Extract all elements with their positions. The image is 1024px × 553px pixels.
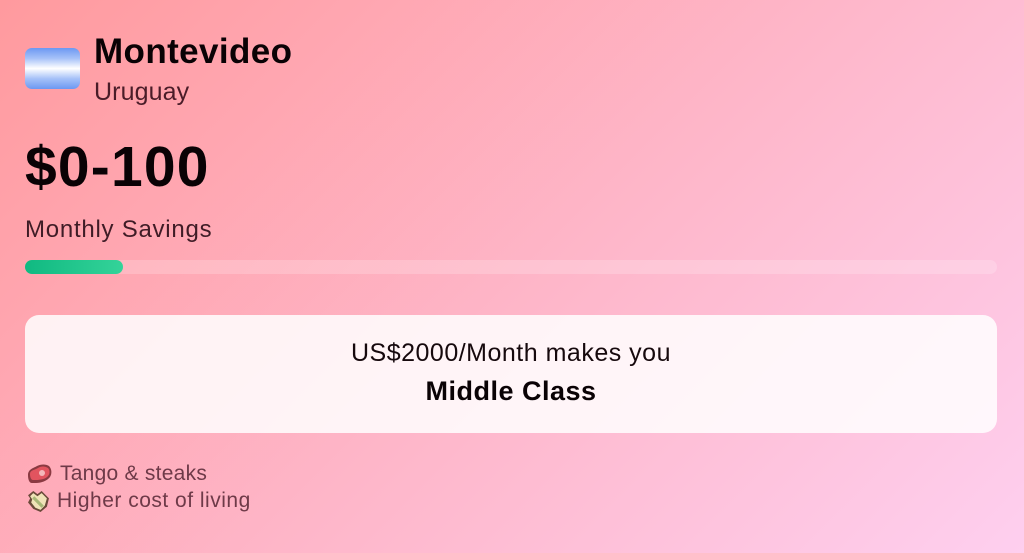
income statement: US$2000/Month makes you [351,339,671,367]
icon: Uruguay flag [25,48,80,89]
panel: income class [25,315,997,433]
icon: money with wings [28,491,49,512]
icon: steak [28,464,52,483]
country label: Uruguay [94,78,189,106]
progress fill [25,260,123,274]
savings amount: $0-100 [25,135,210,199]
class label: Middle Class [425,376,597,406]
fact: tango and steaks: Tango & steaks [60,462,207,485]
city heading: Montevideo [94,32,292,71]
progress bar [25,260,997,274]
savings caption: Monthly Savings [25,216,212,243]
fact: cost of living: Higher cost of living [57,489,251,512]
